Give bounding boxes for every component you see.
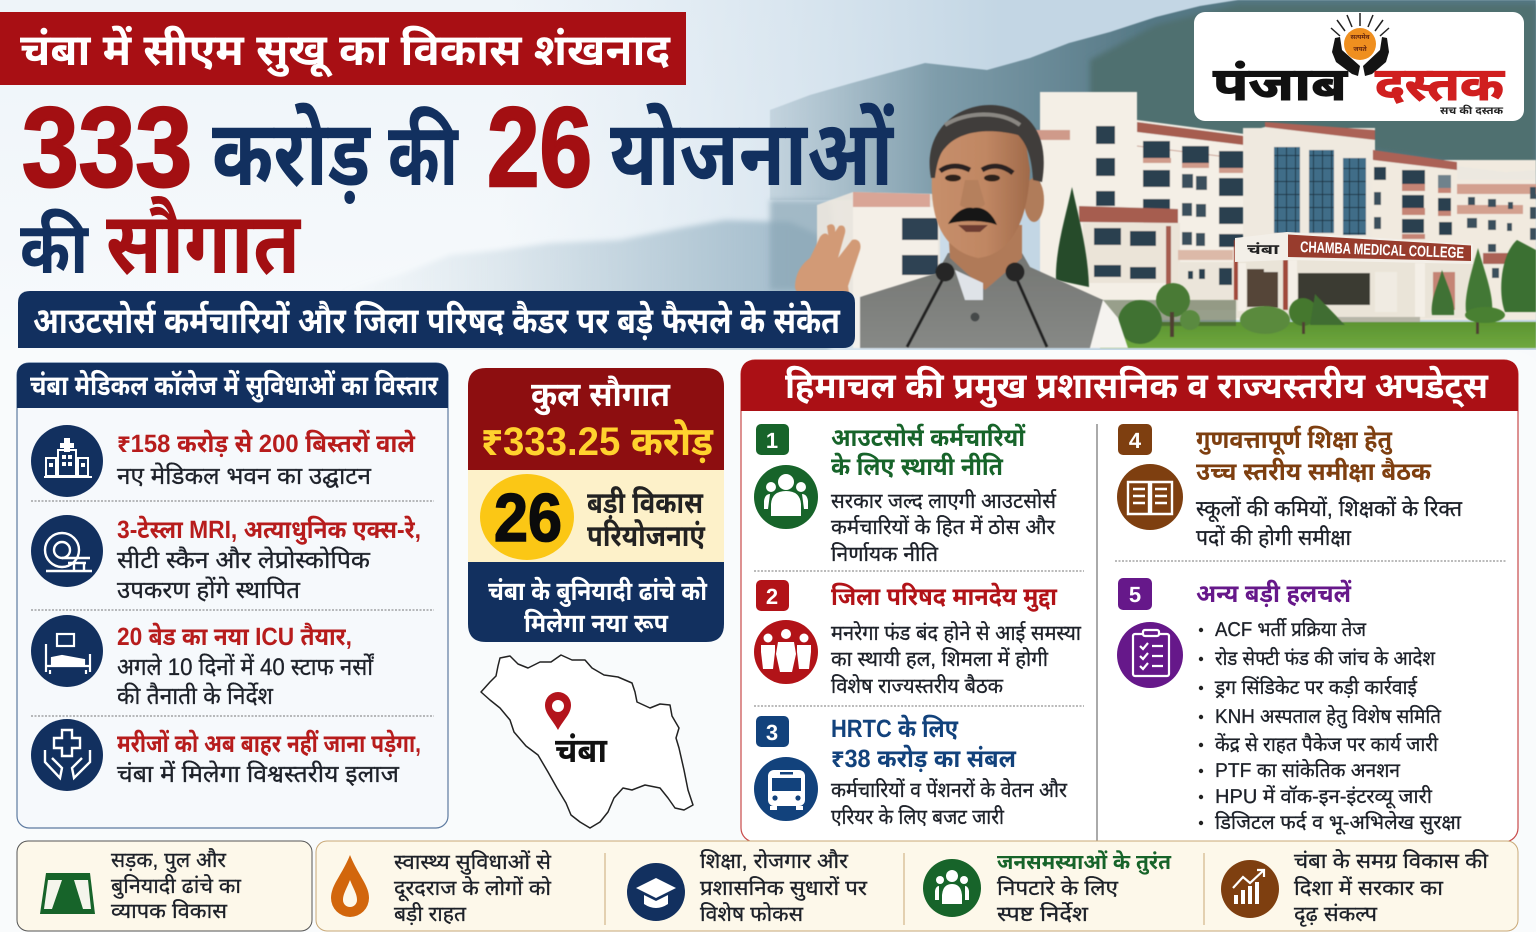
presenter portrait	[795, 105, 1128, 348]
highlight: overall development: दिशा में सरकार का	[1294, 876, 1444, 900]
logo emblem: sun and hands: जयते	[1353, 45, 1368, 53]
panel: total gift summary card: बड़ी विकास	[587, 486, 704, 520]
update 1: outsourcing policy: आउटसोर्स कर्मचारियों	[831, 423, 1026, 452]
update 1: outsourcing policy: 1	[766, 428, 778, 453]
footer card: road and infrastructure	[17, 841, 312, 931]
map: Himachal Pradesh with Chamba pin: चंबा	[555, 732, 608, 770]
update 1: outsourcing policy: कर्मचारियों के हित में ठोस और	[831, 515, 1055, 539]
shirt collar	[955, 270, 983, 300]
highlight: health	[331, 850, 552, 926]
item: ICU	[31, 615, 375, 710]
panel: Himachal administrative updates	[741, 360, 1518, 842]
highlight: public grievances	[923, 850, 1172, 926]
footer card: road and infrastructure: व्यापक विकास	[111, 899, 228, 923]
building: central glass tower	[1243, 122, 1375, 238]
brows, eyes, nose	[940, 166, 1013, 173]
main heading: सौगात	[106, 195, 301, 292]
top headline banner	[0, 12, 686, 85]
panel heading: चंबा मेडिकल कॉलेज में सुविधाओं का विस्तार	[30, 369, 439, 403]
main heading: करोड़	[212, 102, 371, 205]
update 3: HRTC allocation: ₹38 करोड़ का संबल	[831, 744, 1017, 773]
update 5: other major developments	[1117, 578, 1462, 835]
update 2: zila parishad honorarium: जिला परिषद मानदेय मुद्दा	[831, 582, 1058, 612]
panel: total gift summary card	[468, 368, 724, 642]
footer card: road and infrastructure: सड़क, पुल और	[111, 848, 226, 873]
icon: road	[40, 873, 95, 914]
highlight: education: प्रशासनिक सुधारों पर	[700, 876, 867, 901]
main heading: योजनाओं	[610, 102, 895, 205]
update 3: HRTC allocation: एरियर के लिए बजट जारी	[831, 805, 1005, 829]
logo: Punjab Dastak: दस्तक	[1375, 58, 1505, 110]
list of developments: KNH अस्पताल हेतु विशेष समिति	[1215, 705, 1442, 729]
panel: total gift summary card: चंबा के बुनियादी ढांचे को	[488, 576, 708, 607]
update 4: education review: पदों की होगी समीक्षा	[1196, 525, 1351, 550]
building sign: college nameplate	[1235, 232, 1473, 264]
list of developments: डिजिटल फर्द व भू-अभिलेख सुरक्षा	[1215, 811, 1462, 835]
update 2: zila parishad honorarium: 2	[766, 584, 778, 609]
item: MRI and equipment: सीटी स्कैन और लेप्रोस्कोपिक	[117, 546, 371, 574]
update 3: HRTC allocation: HRTC के लिए	[831, 714, 959, 743]
update 1: outsourcing policy: सरकार जल्द लाएगी आउटसोर्स	[831, 489, 1057, 513]
main heading: की	[388, 105, 459, 204]
highlight: health: दूरदराज के लोगों को	[394, 876, 552, 902]
list of developments: केंद्र से राहत पैकेज पर कार्य जारी	[1215, 733, 1439, 756]
logo emblem: sun and hands	[1331, 13, 1389, 76]
update 3: HRTC allocation: 3	[766, 720, 778, 745]
update 3: HRTC allocation	[754, 714, 1067, 829]
lower section white backing	[0, 350, 1536, 932]
footer strip: development highlights	[316, 841, 1518, 931]
moustache	[948, 208, 997, 225]
list of developments: ACF भर्ती प्रक्रिया तेज	[1215, 618, 1367, 641]
icon: ICU bed	[46, 634, 90, 674]
list of developments: PTF का सांकेतिक अनशन	[1215, 759, 1401, 782]
panel: medical college facilities	[17, 363, 448, 828]
update 2: zila parishad honorarium	[754, 580, 1082, 698]
item: new medical building: नए मेडिकल भवन का उद्घाटन	[117, 462, 372, 490]
update 4: education review: स्कूलों की कमियों, शिक्षकों के रिक्त	[1196, 496, 1462, 523]
list of developments: रोड सेफ्टी फंड की जांच के आदेश	[1215, 647, 1435, 670]
panel: total gift summary card: ₹333.25 करोड़	[481, 419, 714, 464]
highlight: overall development	[1221, 849, 1489, 927]
footer card: road and infrastructure: बुनियादी ढांचे का	[111, 874, 242, 899]
update 4: education review	[1117, 424, 1462, 550]
highlight: overall development: दृढ़ संकल्प	[1294, 903, 1378, 927]
update 4: education review: 4	[1129, 428, 1142, 453]
update 5: other major developments: 5	[1129, 582, 1141, 607]
logo: Punjab Dastak	[1194, 12, 1524, 121]
neck	[948, 225, 1022, 290]
update 1: outsourcing policy: निर्णायक नीति	[831, 542, 939, 566]
update 3: HRTC allocation: कर्मचारियों व पेंशनरों के वेतन और	[831, 778, 1067, 802]
highlight: health: स्वास्थ्य सुविधाओं से	[394, 850, 552, 875]
building sign: college nameplate: चंबा	[1247, 241, 1280, 257]
update 2: zila parishad honorarium: का स्थायी हल, शिमला में होगी	[831, 647, 1049, 671]
raised hand	[795, 224, 861, 300]
main heading: 333	[22, 84, 192, 210]
update 2: zila parishad honorarium: मनरेगा फंड बंद होने से आई समस्या	[831, 621, 1082, 645]
highlight: education: शिक्षा, रोजगार और	[700, 849, 848, 873]
logo wordmark: पंजाब	[1213, 58, 1349, 110]
panel: total gift summary card: मिलेगा नया रूप	[524, 608, 669, 638]
highlight: education	[627, 849, 867, 926]
item: ICU: 20 बेड का नया ICU तैयार,	[117, 622, 352, 651]
logo emblem: sun and hands: सत्यमेव	[1350, 33, 1371, 41]
icon: open book	[1128, 482, 1172, 514]
microphones	[907, 275, 1047, 347]
icon: group of people	[764, 474, 808, 516]
top headline banner: चंबा में सीएम सुखू का विकास शंखनाद	[20, 25, 671, 78]
building: left wing	[817, 192, 940, 302]
update 4: education review: गुणवत्तापूर्ण शिक्षा हेतु	[1196, 425, 1393, 455]
main heading: 26	[487, 84, 592, 210]
item: treatment at home: चंबा में मिलेगा विश्वस्तरीय इलाज	[117, 760, 400, 788]
main heading: की	[20, 208, 90, 289]
item: new medical building	[31, 425, 416, 497]
update 5: other major developments: अन्य बड़ी हलचलें	[1196, 579, 1352, 608]
jacket	[860, 253, 1103, 348]
icon: three standing figures	[761, 629, 811, 672]
update 1: outsourcing policy	[754, 423, 1057, 566]
item: MRI and equipment	[31, 515, 421, 604]
logo: Punjab Dastak: सच की दस्तक	[1440, 104, 1503, 117]
item: MRI and equipment: 3-टेस्ला MRI, अत्याधुनिक एक्स-रे,	[117, 515, 421, 545]
icon: MRI machine	[45, 533, 92, 571]
main heading	[20, 84, 895, 292]
building sign: college nameplate: CHAMBA MEDICAL COLLEGE	[1300, 239, 1464, 262]
highlight: public grievances: निपटारे के लिए	[997, 876, 1118, 900]
subheading band: आउटसोर्स कर्मचारियों और जिला परिषद कैडर पर बड़े फैसले के संकेत	[33, 300, 841, 341]
item: ICU: अगले 10 दिनों में 40 स्टाफ नर्सों	[117, 653, 375, 681]
update 2: zila parishad honorarium: विशेष राज्यस्तरीय बैठक	[831, 674, 1004, 698]
map: Himachal Pradesh with Chamba pin	[481, 655, 693, 828]
highlight: public grievances: स्पष्ट निर्देश	[997, 902, 1089, 926]
left white sleeve	[853, 296, 867, 348]
panel heading	[17, 363, 448, 408]
list of developments	[1199, 618, 1462, 835]
highlight: education: विशेष फोकस	[700, 902, 804, 926]
update 1: outsourcing policy: के लिए स्थायी नीति	[831, 452, 1003, 481]
lawn and trees	[1056, 187, 1536, 348]
panel: total gift summary card: परियोजनाएं	[587, 519, 706, 553]
list of developments: HPU में वॉक-इन-इंटरव्यू जारी	[1215, 785, 1433, 809]
hair	[930, 105, 1044, 182]
update 4: education review: उच्च स्तरीय समीक्षा बैठक	[1196, 457, 1432, 486]
list of developments: ड्रग सिंडिकेट पर कड़ी कार्रवाई	[1214, 676, 1418, 699]
building: entrance porch	[1234, 240, 1476, 318]
map pin	[545, 692, 571, 730]
icon: bus	[768, 770, 805, 810]
item: new medical building: ₹158 करोड़ से 200 बिस्तरों वाले	[117, 429, 416, 458]
icon: hands and cross	[45, 730, 90, 778]
item: ICU: की तैनाती के निर्देश	[117, 682, 274, 710]
icon: hospital	[44, 438, 92, 478]
highlight: health: बड़ी राहत	[394, 902, 467, 926]
right white sleeve	[1085, 300, 1128, 348]
building: right wing	[1372, 150, 1536, 320]
face	[932, 130, 1030, 258]
highlight: public grievances: जनसमस्याओं के तुरंत	[997, 850, 1172, 875]
subheading band	[18, 291, 855, 348]
item: treatment at home: मरीजों को अब बाहर नहीं जाना पड़ेगा,	[117, 729, 421, 758]
panel: total gift summary card: कुल सौगात	[531, 375, 671, 416]
hero background: sky, mountains, medical college	[0, 0, 1536, 350]
building: main block	[1030, 92, 1252, 320]
icon: clipboard checklist	[1133, 630, 1169, 676]
item: MRI and equipment: उपकरण होंगे स्थापित	[117, 576, 301, 604]
panel heading: हिमाचल की प्रमुख प्रशासनिक व राज्यस्तरीय अपडेट्स	[785, 365, 1489, 408]
ear	[1024, 178, 1044, 222]
highlight: overall development: चंबा के समग्र विकास की	[1294, 849, 1489, 873]
badge: 26 projects: 26	[494, 480, 562, 556]
item: treatment at home	[31, 719, 421, 791]
